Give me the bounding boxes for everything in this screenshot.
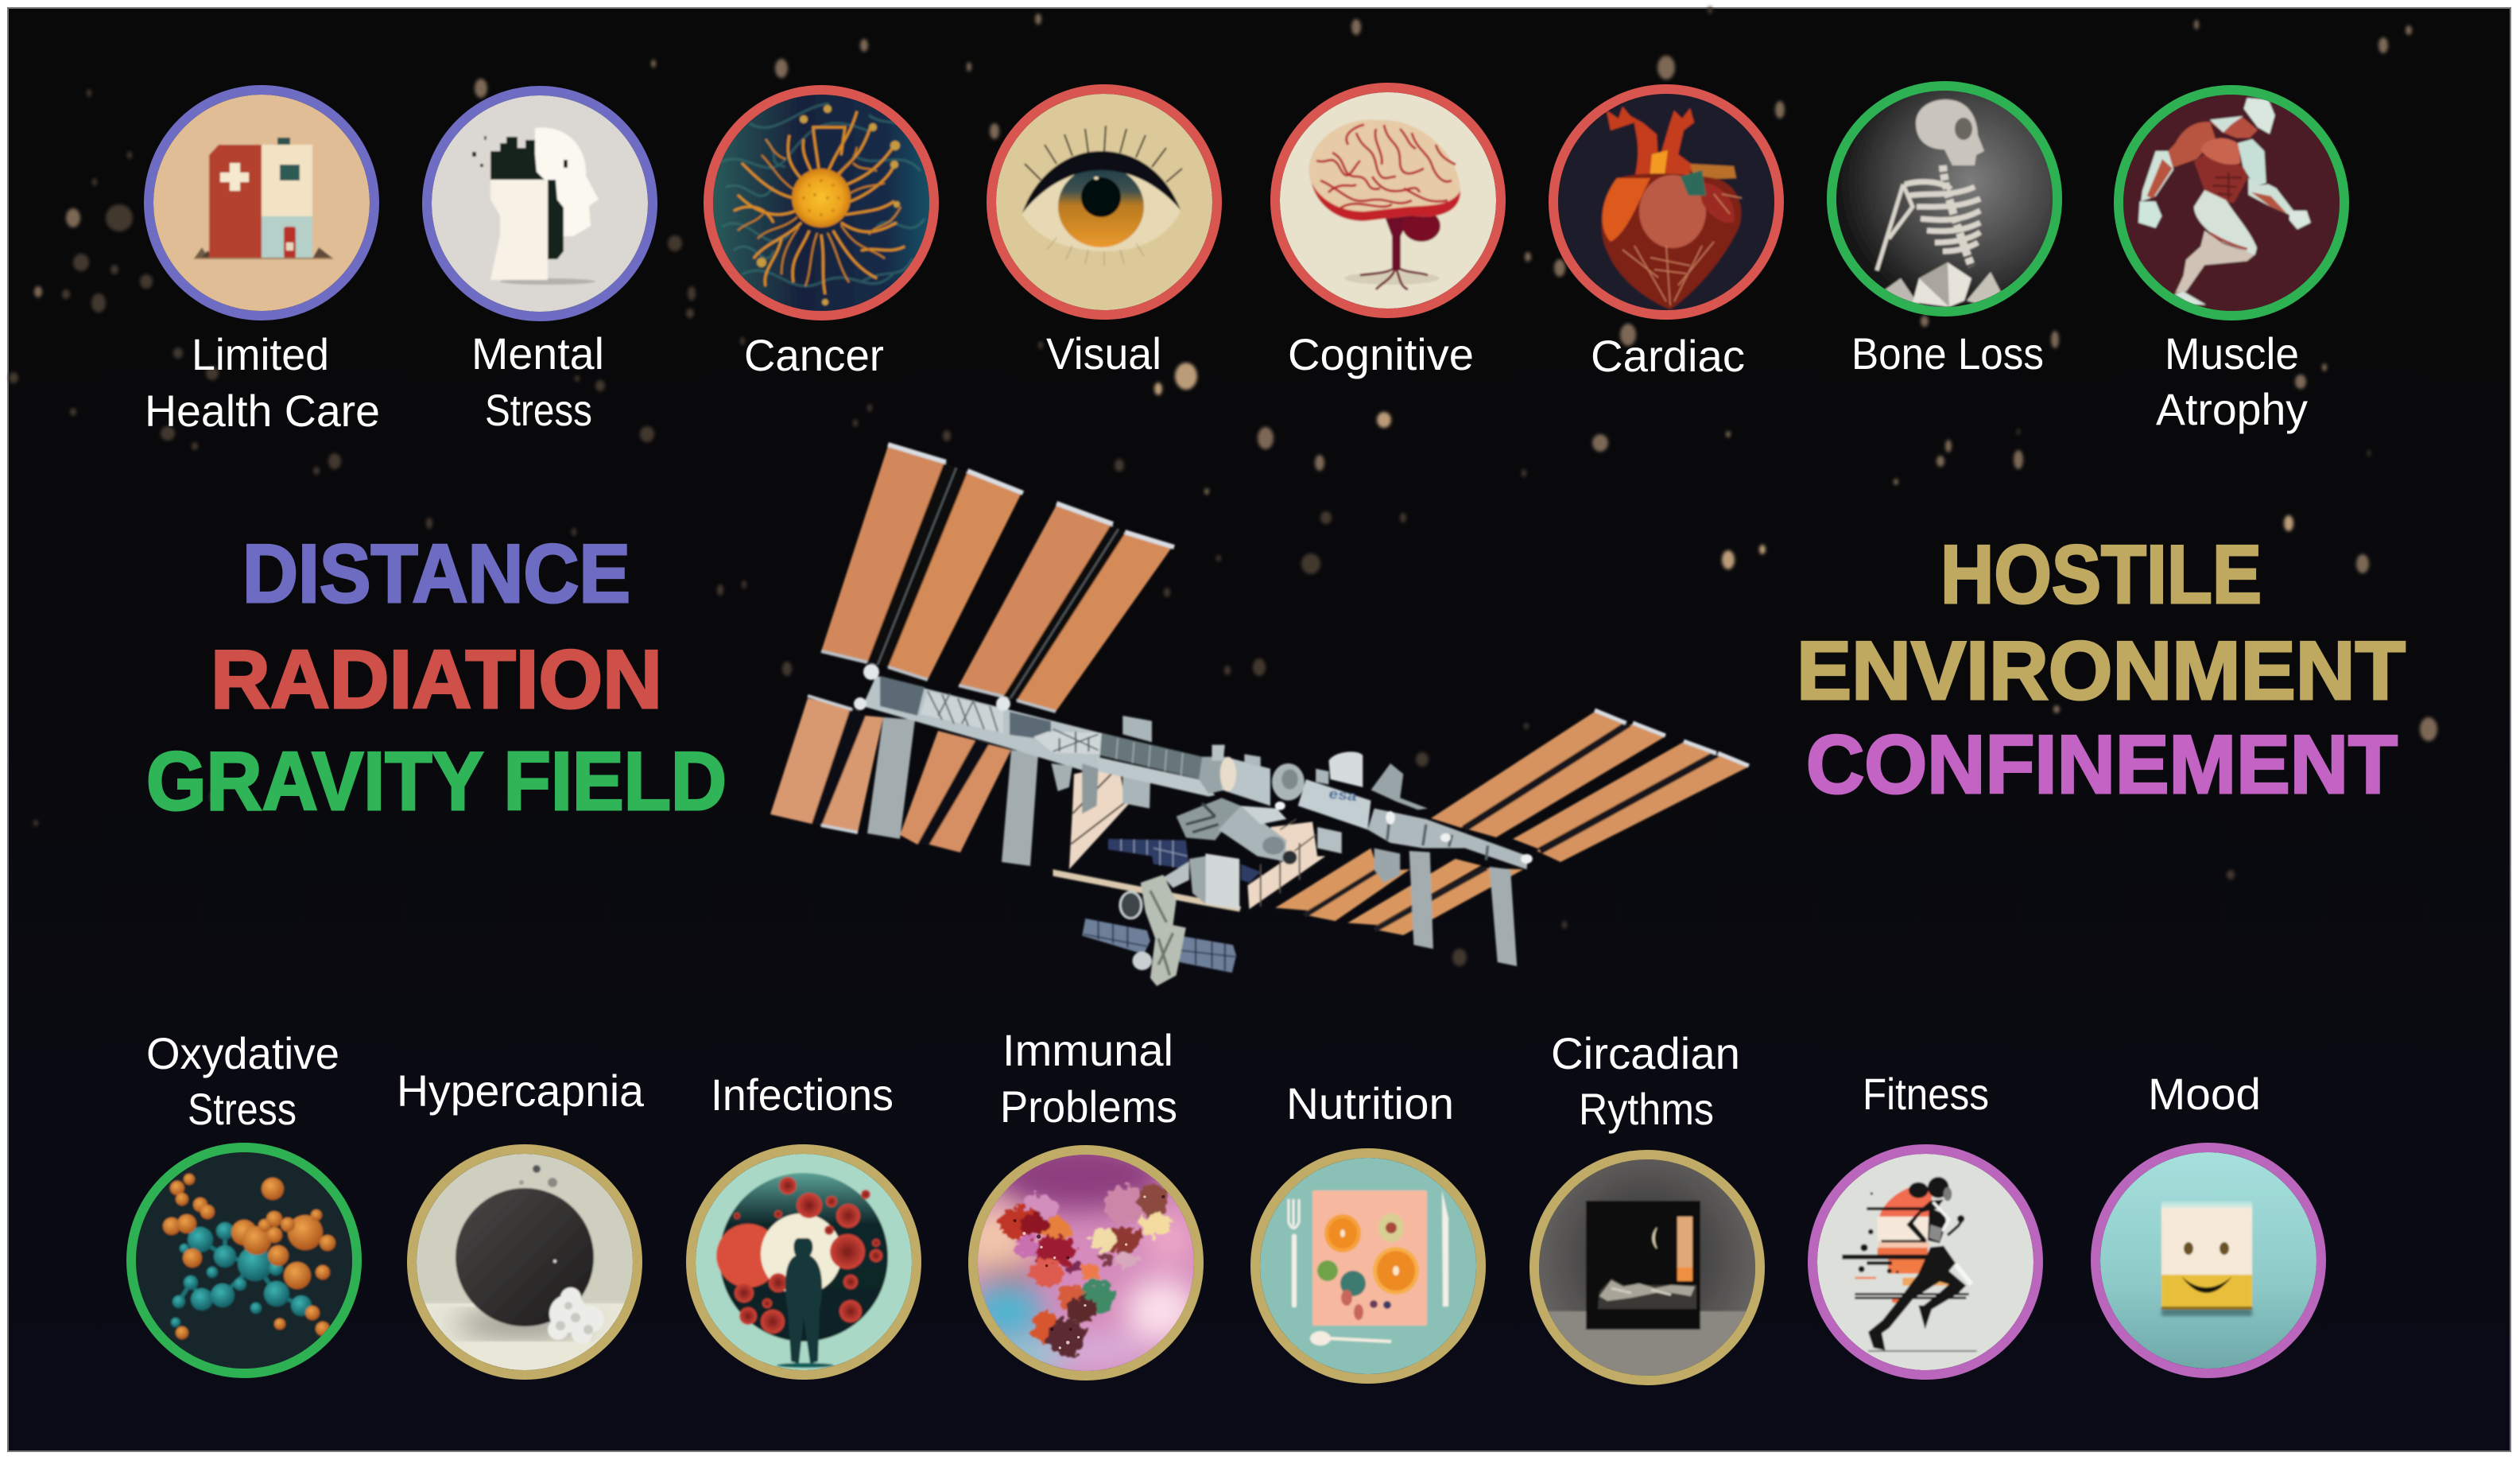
icon: fragmenting head <box>427 91 653 316</box>
label: Limited Health Care <box>145 329 380 436</box>
tile: Cognitive <box>1275 87 1501 379</box>
label: Cancer: Cancer <box>744 330 884 380</box>
solar arrays lower left <box>770 696 1038 866</box>
main truss and node <box>1033 729 1270 806</box>
heading group right: HOSTILE ENVIRONMENT, CONFINEMENT <box>1797 529 2406 811</box>
docked spacecraft with solar wings <box>1082 875 1236 986</box>
icon: person among viruses <box>691 1149 917 1375</box>
icon: female runner <box>1812 1149 2038 1375</box>
tile: Visual <box>991 89 1217 379</box>
icon: tumour cell <box>708 90 934 316</box>
tile: Oxydative Stress <box>131 1028 357 1373</box>
label: Oxydative Stress: Oxydative <box>146 1028 339 1078</box>
tile: Immunal Problems <box>959 1025 1199 1376</box>
icon: dark bedroom at night <box>1534 1155 1760 1383</box>
tile: Cardiac <box>1553 89 1779 381</box>
tile: Hypercapnia <box>397 1066 645 1375</box>
icon: skeleton <box>1832 86 2057 312</box>
heading: CONFINEMENT: CONFINEMENT <box>1806 719 2398 811</box>
icon: eye <box>991 89 1217 315</box>
tile: Circadian Rythms <box>1534 1028 1760 1383</box>
tile: Nutrition <box>1255 1078 1481 1379</box>
icon: dark sphere and white rock <box>412 1149 638 1375</box>
label: Muscle Atrophy <box>2156 328 2308 434</box>
bottom row of health risk icons <box>131 1025 2321 1383</box>
solar arrays right <box>1431 710 1749 862</box>
central station assembly <box>1033 716 1533 986</box>
module logo: esa <box>1328 786 1359 805</box>
icon: plate of food <box>1255 1153 1481 1379</box>
icon: smiling block <box>2095 1147 2321 1373</box>
tile: Limited Health Care <box>145 90 380 436</box>
starboard truss with radiators <box>1367 763 1533 966</box>
label: Oxydative Stress <box>146 1028 339 1134</box>
label: Fitness: Fitness <box>1863 1069 1989 1119</box>
label: Circadian Rythms: Rythms <box>1579 1084 1714 1134</box>
label: Infections: Infections <box>711 1070 894 1120</box>
cream radiators and bar <box>1051 716 1342 912</box>
label: Mood: Mood <box>2148 1069 2261 1119</box>
heading group left: DISTANCE, RADIATION, GRAVITY FIELD <box>146 528 727 828</box>
heading: RADIATION: RADIATION <box>211 634 662 726</box>
heading: GRAVITY FIELD: GRAVITY FIELD <box>146 736 727 828</box>
tile: Cancer <box>708 90 934 380</box>
icon: molecules <box>131 1147 357 1373</box>
label: Mental Stress: Mental <box>471 328 604 379</box>
label: Visual: Visual <box>1046 328 1161 379</box>
International Space Station illustration <box>770 445 1749 986</box>
label: Limited Health Care: Health Care <box>145 386 380 436</box>
label: Immunal Problems: Problems <box>1000 1081 1177 1132</box>
tile: Mental Stress <box>427 91 653 435</box>
heading: ENVIRONMENT: ENVIRONMENT <box>1797 625 2406 717</box>
tile: Infections <box>691 1070 917 1375</box>
label: Bone Loss: Bone Loss <box>1851 328 2044 379</box>
label: Immunal Problems: Immunal <box>1002 1025 1173 1075</box>
icon: anatomical heart <box>1553 89 1779 315</box>
solar arrays upper left <box>821 445 1174 712</box>
solar wing of docked lab <box>1108 839 1261 883</box>
label: Limited Health Care: Limited <box>192 329 329 379</box>
label: Mental Stress: Stress <box>485 385 592 435</box>
icon: running muscular figure <box>2119 90 2344 316</box>
heading: DISTANCE: DISTANCE <box>242 528 630 620</box>
top row of health risk icons <box>145 86 2344 436</box>
label: Immunal Problems <box>1000 1025 1177 1132</box>
tile: Bone Loss <box>1832 86 2057 379</box>
label: Mental Stress <box>471 328 604 435</box>
tile: Fitness <box>1812 1069 2038 1375</box>
lower solar arrays <box>1275 848 1523 935</box>
tile: Muscle Atrophy <box>2119 90 2344 434</box>
label: Nutrition: Nutrition <box>1286 1078 1454 1128</box>
label: Muscle Atrophy: Muscle <box>2165 328 2299 379</box>
label: Cognitive: Cognitive <box>1288 329 1474 379</box>
label: Circadian Rythms <box>1551 1028 1740 1134</box>
laboratory cluster <box>1163 798 1297 909</box>
tile: Mood <box>2095 1069 2321 1373</box>
label: Cardiac: Cardiac <box>1591 331 1745 381</box>
label: Oxydative Stress: Stress <box>188 1084 297 1134</box>
heading: HOSTILE: HOSTILE <box>1940 529 2262 621</box>
left truss <box>854 664 1102 775</box>
label: Muscle Atrophy: Atrophy <box>2156 384 2308 434</box>
European module with logo <box>1272 751 1371 829</box>
icon: brain tree <box>1275 87 1501 313</box>
icon: antibody <box>959 1140 1199 1376</box>
label: Hypercapnia: Hypercapnia <box>397 1066 645 1116</box>
drifting dust particles <box>9 6 2437 966</box>
icon: hospital building <box>149 90 374 316</box>
label: Circadian Rythms: Circadian <box>1551 1028 1740 1078</box>
